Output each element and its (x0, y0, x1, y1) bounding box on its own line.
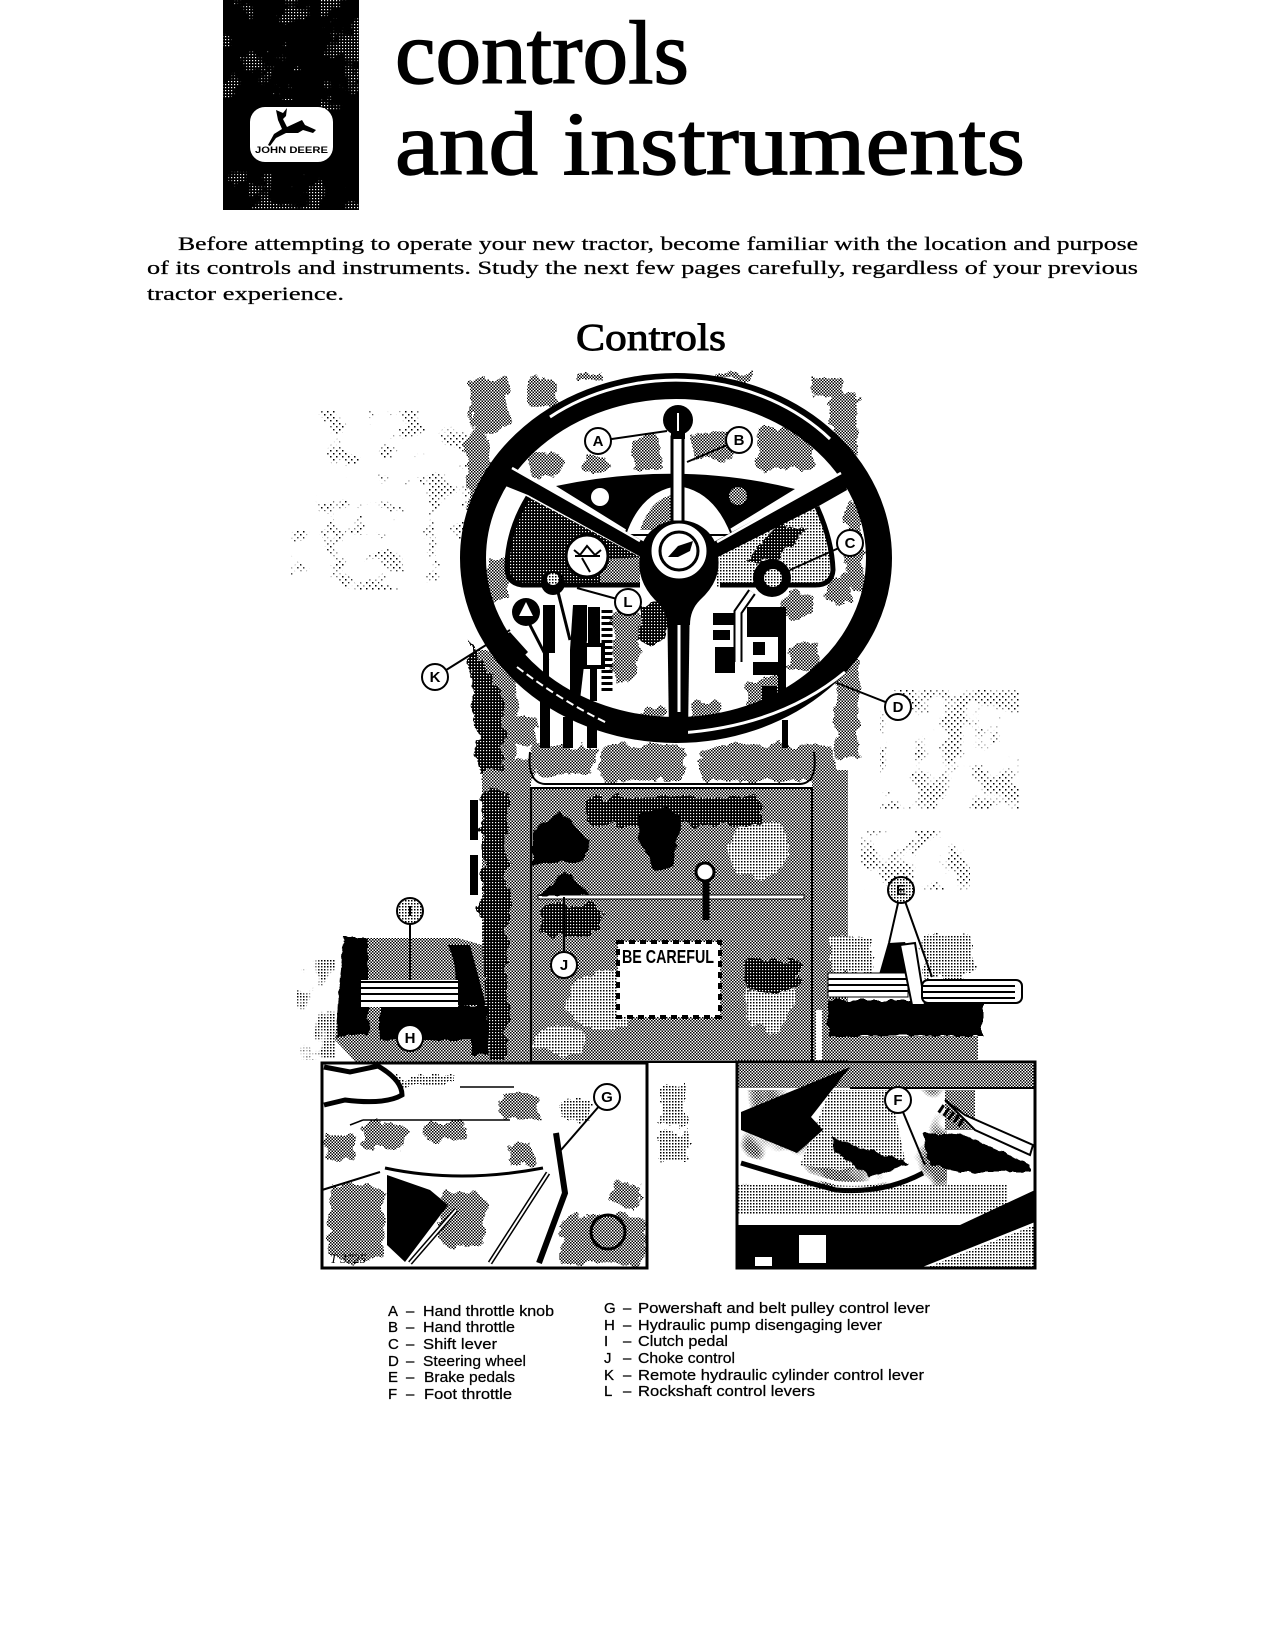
callout B: B (734, 432, 745, 449)
callout L (615, 589, 641, 615)
legend right column: J (604, 1350, 612, 1367)
legend left column: A (388, 1303, 398, 1320)
part number: T 3725 (330, 1251, 367, 1266)
legend left column: Foot throttle (424, 1386, 512, 1403)
callout A: A (593, 433, 604, 450)
legend right column: H (604, 1317, 615, 1334)
callout J (551, 952, 577, 978)
choke triangle (540, 870, 590, 896)
key switch (638, 806, 682, 872)
callout K: K (430, 669, 441, 686)
callouts (397, 427, 932, 1051)
warning sign (618, 942, 720, 1017)
callout H: H (405, 1030, 415, 1047)
levers and knobs (512, 405, 791, 660)
brake pedals (828, 943, 1022, 1005)
callout J: J (560, 957, 568, 974)
legend left column: Brake pedals (424, 1369, 515, 1386)
warning sign: BE CAREFUL (622, 947, 714, 967)
levers below dash (540, 592, 788, 748)
intro paragraph: tractor experience. (147, 284, 344, 305)
legend left column: Hand throttle knob (423, 1303, 554, 1320)
callout F (885, 1087, 911, 1113)
shift pattern (713, 607, 788, 748)
legend left column: E (388, 1369, 398, 1386)
heading: Controls: Controls (576, 317, 726, 359)
legend right column: Remote hydraulic cylinder control lever (638, 1367, 924, 1384)
legend left column: D (388, 1353, 399, 1370)
legend left column: B (388, 1319, 398, 1336)
callout H (397, 1025, 423, 1051)
legend right column (604, 1300, 930, 1400)
header block with logo (223, 0, 359, 210)
legend right column: I (604, 1333, 608, 1350)
background speckle (290, 410, 1020, 1060)
callout C (837, 530, 863, 556)
legend right column: Powershaft and belt pulley control lever (638, 1300, 930, 1317)
legend left column: – (406, 1369, 415, 1386)
legend left column: Steering wheel (423, 1353, 526, 1370)
intro paragraph (147, 234, 1138, 305)
legend right column: Rockshaft control levers (638, 1383, 815, 1400)
callout G (594, 1084, 620, 1110)
legend left column: F (388, 1386, 397, 1403)
title: controls (395, 4, 689, 103)
remote cylinder knob (512, 598, 540, 626)
legend left column: C (388, 1336, 399, 1353)
title (395, 4, 1025, 194)
steering wheel (473, 380, 879, 735)
rockshaft knob (541, 571, 565, 595)
dash panel (507, 474, 833, 587)
spokes (503, 467, 650, 562)
legend left column: – (406, 1386, 415, 1403)
legend left column: – (406, 1336, 415, 1353)
legend right column: – (623, 1333, 632, 1350)
callout I (397, 898, 423, 924)
photo: tractor controls (291, 370, 1023, 1063)
tractor body gray patches (464, 370, 866, 1062)
legend right column: Hydraulic pump disengaging lever (638, 1317, 882, 1334)
callout D (885, 694, 911, 720)
legend right column: G (604, 1300, 616, 1317)
callout D: D (893, 699, 904, 716)
legend right column: K (604, 1367, 614, 1384)
inset gap speckle (657, 1083, 692, 1162)
legend left column: – (406, 1353, 415, 1370)
shift knob (753, 559, 791, 597)
knob cluster (533, 812, 590, 865)
legend right column: – (623, 1367, 632, 1384)
legend left column (388, 1303, 554, 1403)
legend left column: – (406, 1319, 415, 1336)
callout C: C (845, 535, 856, 552)
small lever (702, 868, 710, 920)
callout K (422, 664, 448, 690)
legend right column: – (623, 1350, 632, 1367)
legend right column: Clutch pedal (638, 1333, 728, 1350)
callout E: E (896, 882, 906, 899)
icon: John Deere logo: JOHN DEERE (255, 145, 328, 155)
hand throttle knob (663, 405, 693, 435)
legend right column: – (623, 1383, 632, 1400)
front panel (531, 788, 812, 1062)
legend left column: – (406, 1303, 415, 1320)
callout L: L (623, 594, 633, 611)
inset photo: powershaft lever (322, 1063, 647, 1268)
legend right column: – (623, 1317, 632, 1334)
intro paragraph: Before attempting to operate your new tractor, become familiar with the location and purpose (178, 234, 1138, 255)
left platform (335, 937, 490, 1062)
callout I: I (408, 903, 412, 920)
hub (639, 520, 719, 625)
legend right column: L (604, 1383, 612, 1400)
callout B (726, 427, 752, 453)
title: and instruments (395, 95, 1025, 194)
legend right column: Choke control (638, 1350, 735, 1367)
callout G: G (601, 1089, 613, 1106)
pedal ribs (361, 980, 458, 1007)
legend left column: Hand throttle (423, 1319, 515, 1336)
intro paragraph: of its controls and instruments. Study the next few pages carefully, regardless of your previous (147, 258, 1138, 279)
legend right column: – (623, 1300, 632, 1317)
callout E (888, 877, 914, 903)
icon: John Deere logo (250, 107, 333, 162)
right platform (828, 930, 1022, 1060)
page (147, 0, 1138, 1400)
legend left column: Shift lever (423, 1336, 497, 1353)
inset photo: foot throttle (737, 1062, 1035, 1268)
callout A (585, 428, 611, 454)
callout F: F (893, 1092, 903, 1109)
